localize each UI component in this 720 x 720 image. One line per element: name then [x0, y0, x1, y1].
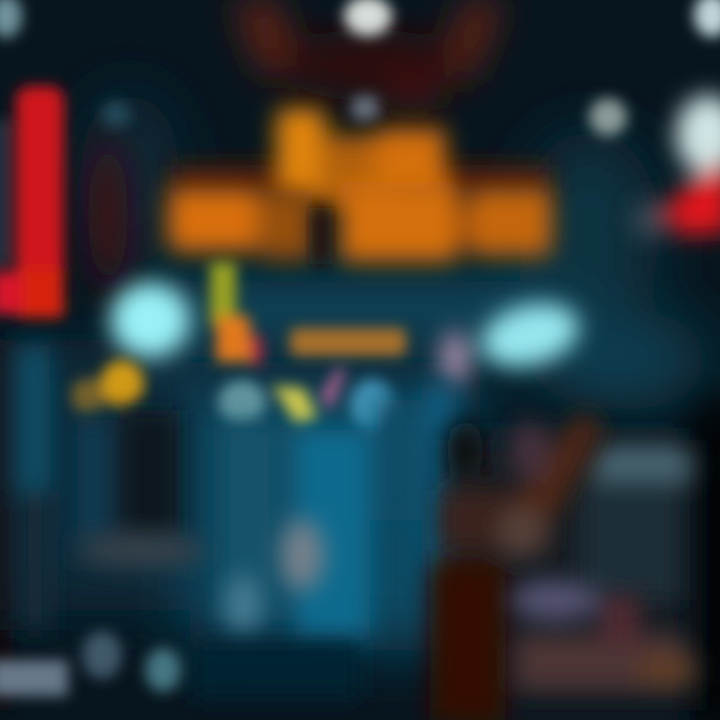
- figure in red: [430, 410, 605, 720]
- dark right edge: [695, 400, 720, 720]
- title red haze: [170, 165, 550, 195]
- bottom left grey bar: [0, 631, 181, 696]
- colourful bunting: [218, 365, 394, 431]
- ceiling lights: [0, 0, 720, 136]
- dark mass behind figures: [450, 440, 690, 710]
- table: [511, 580, 695, 690]
- orange title, line one: [276, 108, 446, 205]
- yellow sign at left: [71, 360, 144, 414]
- dark red side glow: [88, 139, 128, 291]
- lower floor shadow: [190, 642, 360, 698]
- left counter: [75, 533, 205, 567]
- grey jacket figure: [580, 445, 692, 600]
- yellow and orange vertical strip: [210, 262, 263, 365]
- small orange subtitle: [290, 328, 406, 356]
- white and red shape at right: [632, 95, 720, 240]
- light cyan blobs: [110, 282, 586, 386]
- blue floor and crowd: [222, 385, 456, 640]
- grey figure on floor: [280, 519, 324, 591]
- grey light over title: [350, 95, 380, 121]
- orange title, line two: [168, 182, 552, 262]
- red neon sign: [0, 86, 64, 318]
- dark gap in title: [314, 208, 328, 264]
- dark red ceiling arcs: [232, 0, 505, 110]
- left columns: [0, 340, 180, 710]
- teal ambient glow: [0, 90, 710, 650]
- pale floor highlight: [226, 575, 260, 635]
